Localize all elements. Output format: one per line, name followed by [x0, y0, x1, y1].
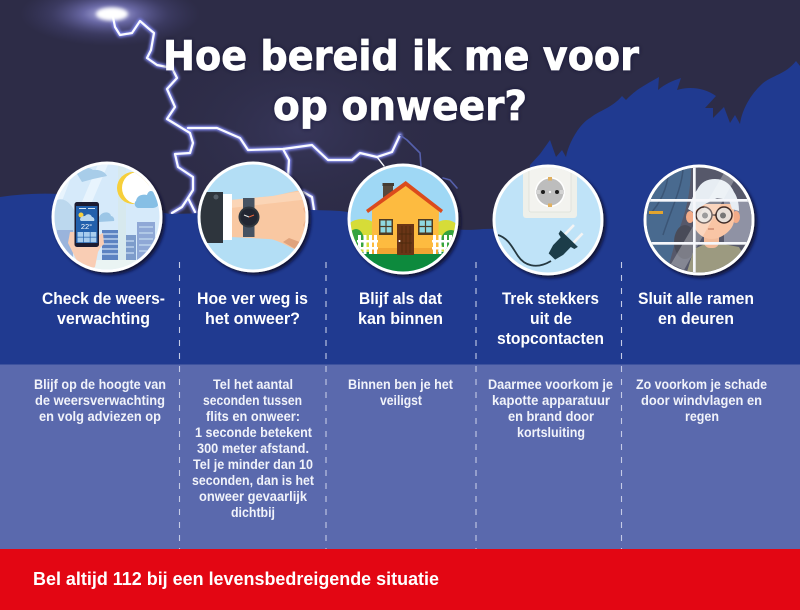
column 5 text: Zo voorkom je schade — [636, 377, 767, 392]
column 1 text: Blijf op de hoogte van — [34, 377, 166, 392]
column 2 text: seconden tussen — [203, 393, 302, 408]
column 3 text: veiligst — [380, 393, 422, 408]
column 1 text: en volg adviezen op — [39, 409, 161, 424]
column 2 text: dichtbij — [231, 505, 275, 520]
column 4 text: kortsluiting — [517, 425, 585, 440]
column 2 text: 300 meter afstand. — [197, 441, 309, 456]
red footer band — [0, 549, 800, 610]
column 2 text: Tel het aantal — [213, 377, 293, 392]
woman — [687, 244, 742, 272]
column 3 heading: kan binnen — [358, 309, 443, 328]
lightning flash core — [96, 8, 128, 20]
text panel — [0, 364, 800, 550]
bolt core — [113, 17, 400, 213]
title — [163, 32, 640, 130]
column 5 heading: en deuren — [658, 309, 734, 328]
column 3 heading: Blijf als dat — [359, 289, 442, 308]
plug — [548, 224, 584, 260]
column 2 text: seconden, dan is het — [192, 473, 314, 488]
column 2 text: onweer gevaarlijk — [199, 489, 307, 504]
column 5 heading — [638, 289, 754, 328]
column 5 text: regen — [685, 409, 719, 424]
glass glare — [671, 173, 736, 270]
column dividers — [180, 262, 622, 549]
column 2 heading — [197, 289, 308, 328]
column 1 text — [34, 377, 166, 424]
column 4 text: en brand door — [508, 409, 595, 424]
bolt glow — [113, 17, 400, 213]
phone — [74, 202, 99, 247]
sky glow — [150, 30, 450, 230]
column 4 heading: stopcontacten — [497, 329, 604, 348]
title: op onweer? — [273, 82, 527, 130]
icon: house — [343, 164, 462, 274]
column 2 heading: Hoe ver weg is — [197, 289, 308, 308]
lightning bolt — [113, 17, 457, 213]
column 4 heading: uit de — [530, 309, 572, 328]
column 2 text: flits en onweer: — [206, 409, 300, 424]
icon: phone with weather app — [52, 162, 162, 272]
column 2 text — [192, 377, 314, 520]
title: Hoe bereid ik me voor — [163, 32, 640, 80]
column 3 text: Binnen ben je het — [348, 377, 453, 392]
column 2 heading: het onweer? — [205, 309, 300, 328]
column 5 text — [636, 377, 767, 424]
column 3 heading — [358, 289, 443, 328]
column 3 text — [348, 377, 453, 408]
window frame — [693, 165, 696, 275]
hand — [68, 232, 101, 268]
column 4 heading: Trek stekkers — [502, 289, 599, 308]
footer emergency message: Bel altijd 112 bij een levensbedreigende situatie — [33, 568, 439, 589]
column 1 heading: verwachting — [57, 309, 150, 328]
column 1 text: de weersverwachting — [35, 393, 165, 408]
lightning flash glow — [20, 0, 200, 46]
column 4 text: kapotte apparatuur — [492, 393, 611, 408]
column 1 heading — [42, 289, 165, 328]
column 4 heading — [497, 289, 604, 348]
column 1 heading: Check de weers- — [42, 289, 165, 308]
column 4 text: Daarmee voorkom je — [488, 377, 613, 392]
column 2 text: Tel je minder dan 10 — [193, 457, 313, 472]
column 2 text: 1 seconde betekent — [195, 425, 312, 440]
icon: woman behind window — [644, 164, 754, 276]
column 4 text — [488, 377, 613, 440]
icon: wall socket and plug — [492, 160, 604, 276]
column 5 heading: Sluit alle ramen — [638, 289, 754, 308]
faded bolt branches — [400, 135, 457, 188]
icon: wristwatch — [198, 162, 308, 272]
column 5 text: door windvlagen en — [641, 393, 762, 408]
blue landscape with tree silhouette — [0, 61, 800, 366]
icon: phone with weather app: 22° — [81, 222, 92, 231]
